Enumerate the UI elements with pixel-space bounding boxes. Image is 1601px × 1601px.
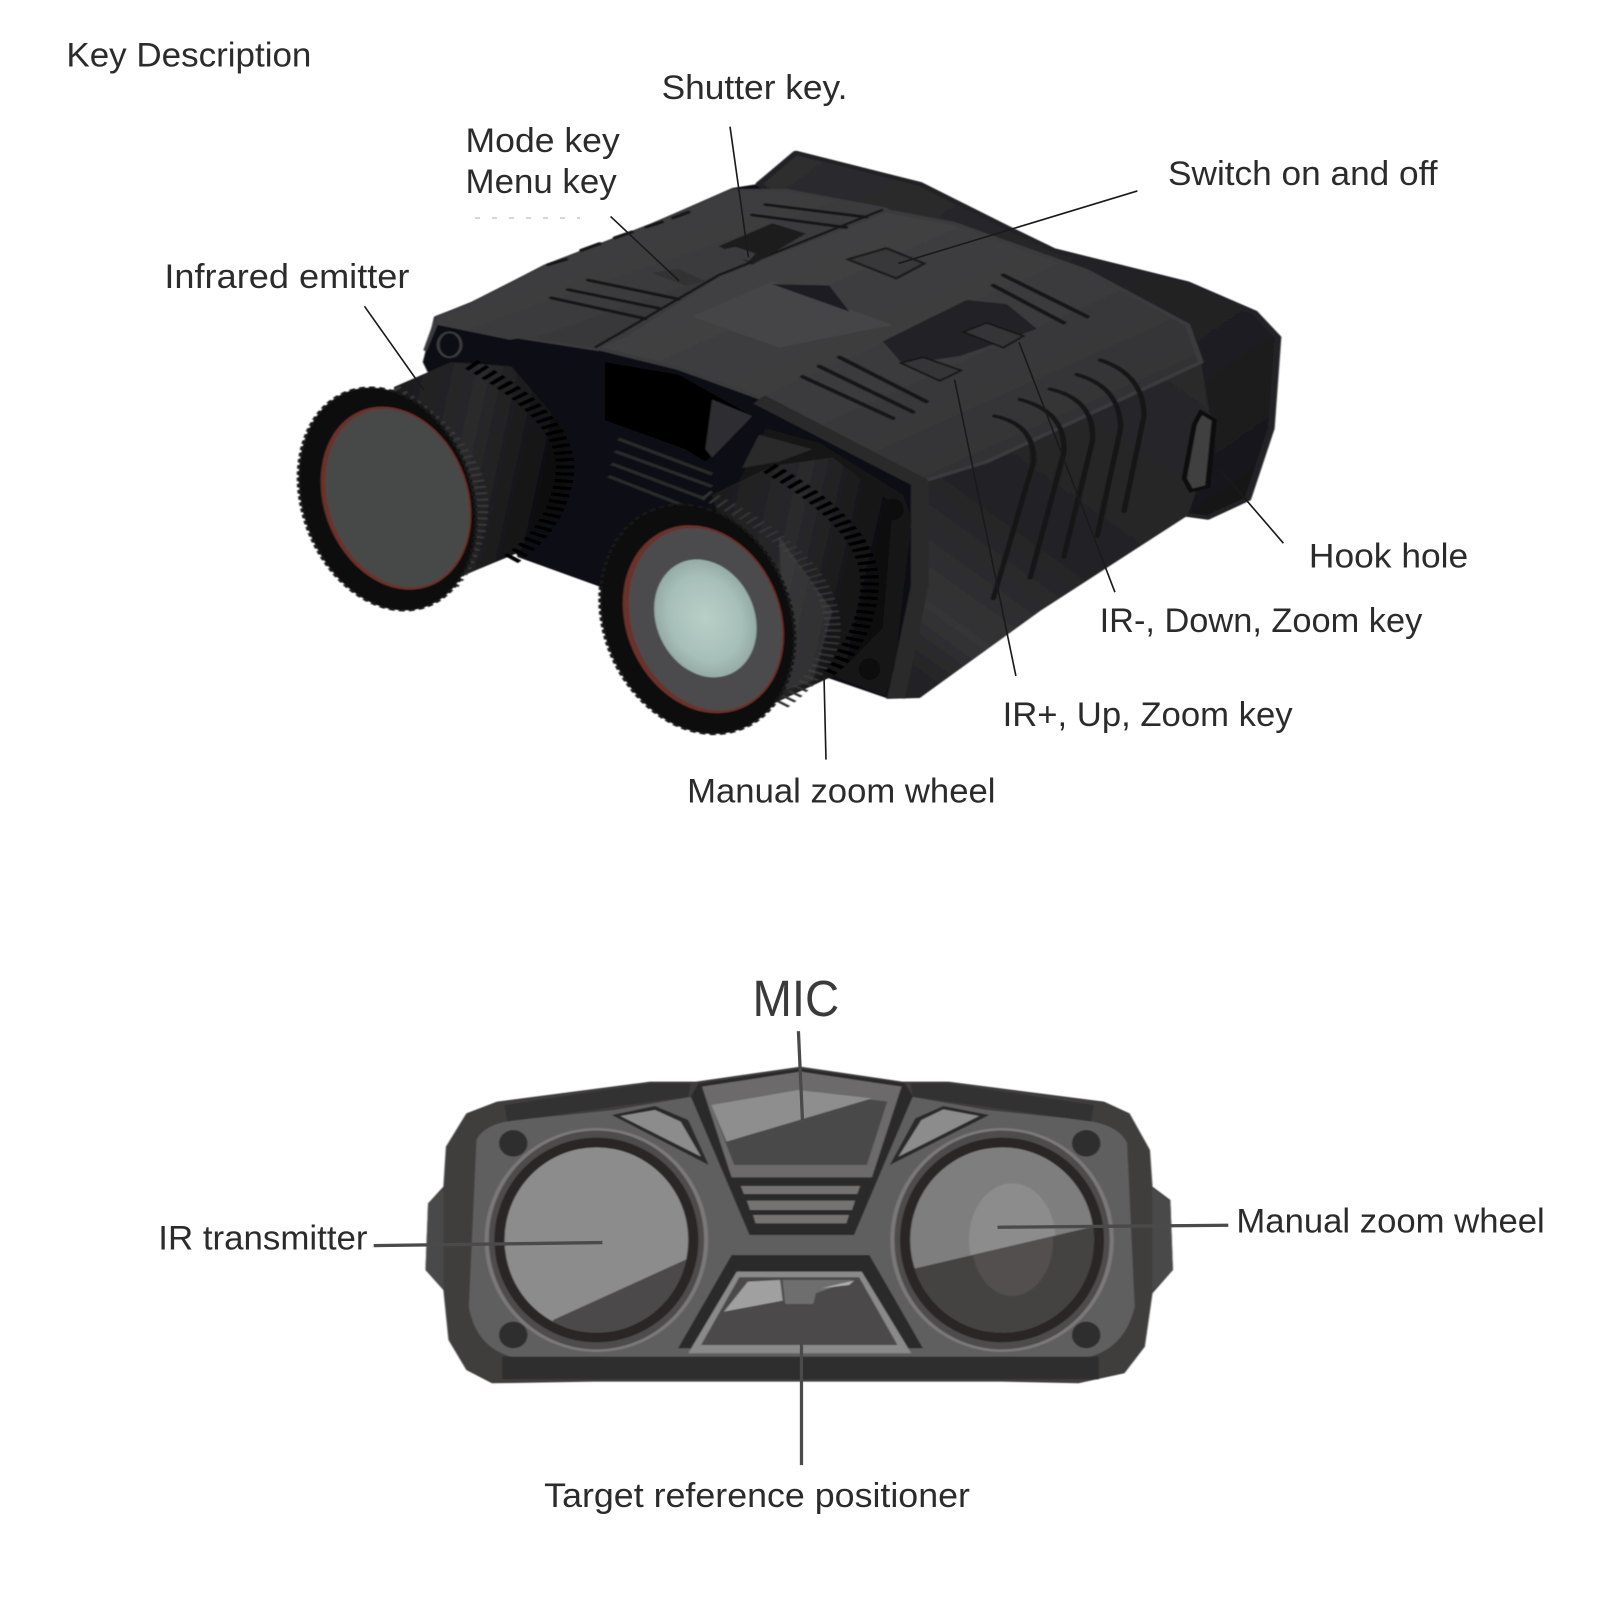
body right top shell bbox=[595, 211, 1201, 482]
line: mode and menu key bbox=[611, 216, 679, 281]
label: target reference positioner: Target reference positioner bbox=[544, 1477, 970, 1515]
side window left bbox=[612, 1106, 709, 1165]
lens glass bbox=[644, 556, 767, 681]
inner face bbox=[469, 1097, 1135, 1358]
photo: night vision binoculars bbox=[280, 153, 1278, 741]
small window above right lens bbox=[742, 435, 813, 468]
body grooves bbox=[803, 275, 1087, 418]
front rim bbox=[759, 399, 920, 698]
front face left bbox=[425, 325, 826, 677]
shutter key bbox=[714, 247, 756, 261]
body outline bbox=[426, 1067, 1173, 1383]
front panel around right lens bbox=[732, 429, 912, 696]
screen panel bbox=[692, 281, 893, 348]
label: menu key: Menu key bbox=[466, 163, 617, 201]
line: infrared emitter bbox=[364, 306, 424, 390]
line: shutter key bbox=[730, 127, 748, 257]
line: manual zoom wheel right bbox=[998, 1225, 1228, 1227]
label: shutter key: Shutter key. bbox=[662, 69, 847, 107]
erased label remnant bbox=[475, 217, 580, 219]
IR plus key bbox=[901, 357, 961, 381]
rear eyepiece bbox=[759, 153, 1278, 518]
side tab right bbox=[1153, 1188, 1173, 1290]
zoom key well bbox=[883, 300, 1037, 364]
label: infrared emitter: Infrared emitter bbox=[164, 258, 409, 296]
barrel highlight bbox=[779, 536, 833, 690]
label: manual zoom wheel: Manual zoom wheel bbox=[687, 773, 995, 811]
label: switch on and off: Switch on and off bbox=[1168, 155, 1438, 193]
side ribs bbox=[993, 360, 1144, 598]
callout lines: front view bbox=[374, 1031, 1228, 1465]
shutter key well bbox=[719, 223, 806, 265]
bottom band bbox=[502, 1357, 1099, 1379]
right lens barrel bbox=[712, 458, 893, 704]
left lens barrel bbox=[394, 362, 565, 598]
window glass edge bbox=[705, 399, 752, 458]
emitter ring bbox=[438, 332, 461, 357]
right lens bbox=[892, 1129, 1112, 1351]
heading: key description: Key Description bbox=[66, 36, 311, 74]
top window bbox=[691, 1068, 913, 1235]
line: switch bbox=[898, 191, 1137, 263]
line: target reference positioner bbox=[800, 1338, 803, 1465]
line: IR minus key bbox=[1019, 342, 1115, 592]
left lens bbox=[280, 381, 495, 617]
power key bbox=[848, 248, 924, 278]
line: hook hole bbox=[1220, 470, 1283, 543]
line: manual zoom wheel bbox=[824, 674, 826, 760]
screws bbox=[882, 499, 904, 520]
hook hole strap bbox=[1184, 412, 1214, 491]
screws bbox=[499, 1130, 1101, 1348]
label: IR minus down zoom key: IR-, Down, Zoom key bbox=[1100, 602, 1423, 640]
line: MIC bbox=[798, 1031, 803, 1121]
bottom window bbox=[678, 1255, 923, 1353]
IR minus key bbox=[963, 323, 1024, 348]
shoulders bbox=[505, 1083, 691, 1122]
label: MIC: MIC bbox=[752, 970, 839, 1027]
label: manual zoom wheel right: Manual zoom wheel bbox=[1236, 1202, 1545, 1240]
mode key bbox=[652, 269, 705, 285]
body silhouette bbox=[423, 153, 1278, 698]
top ridges left edge bbox=[548, 205, 866, 319]
device: front view illustration bbox=[426, 1067, 1173, 1383]
shell seam bbox=[595, 210, 883, 348]
left lens bbox=[487, 1129, 706, 1351]
side window right bbox=[890, 1106, 989, 1165]
label: hook hole: Hook hole bbox=[1309, 538, 1468, 576]
line: IR plus key bbox=[955, 380, 1016, 676]
body side face bbox=[886, 362, 1214, 699]
label: mode key: Mode key bbox=[466, 122, 620, 160]
stripes bbox=[741, 1186, 860, 1194]
panel arrow bbox=[772, 284, 849, 312]
front window bbox=[605, 362, 752, 462]
callout lines: top product bbox=[364, 127, 1283, 760]
label: IR transmitter: IR transmitter bbox=[158, 1220, 368, 1258]
line: IR transmitter bbox=[374, 1243, 602, 1246]
front grille bbox=[608, 439, 712, 511]
right lens bbox=[580, 498, 814, 741]
body left top shell bbox=[425, 190, 886, 350]
side tab left bbox=[426, 1190, 443, 1290]
label: IR plus up zoom key: IR+, Up, Zoom key bbox=[1003, 696, 1293, 734]
